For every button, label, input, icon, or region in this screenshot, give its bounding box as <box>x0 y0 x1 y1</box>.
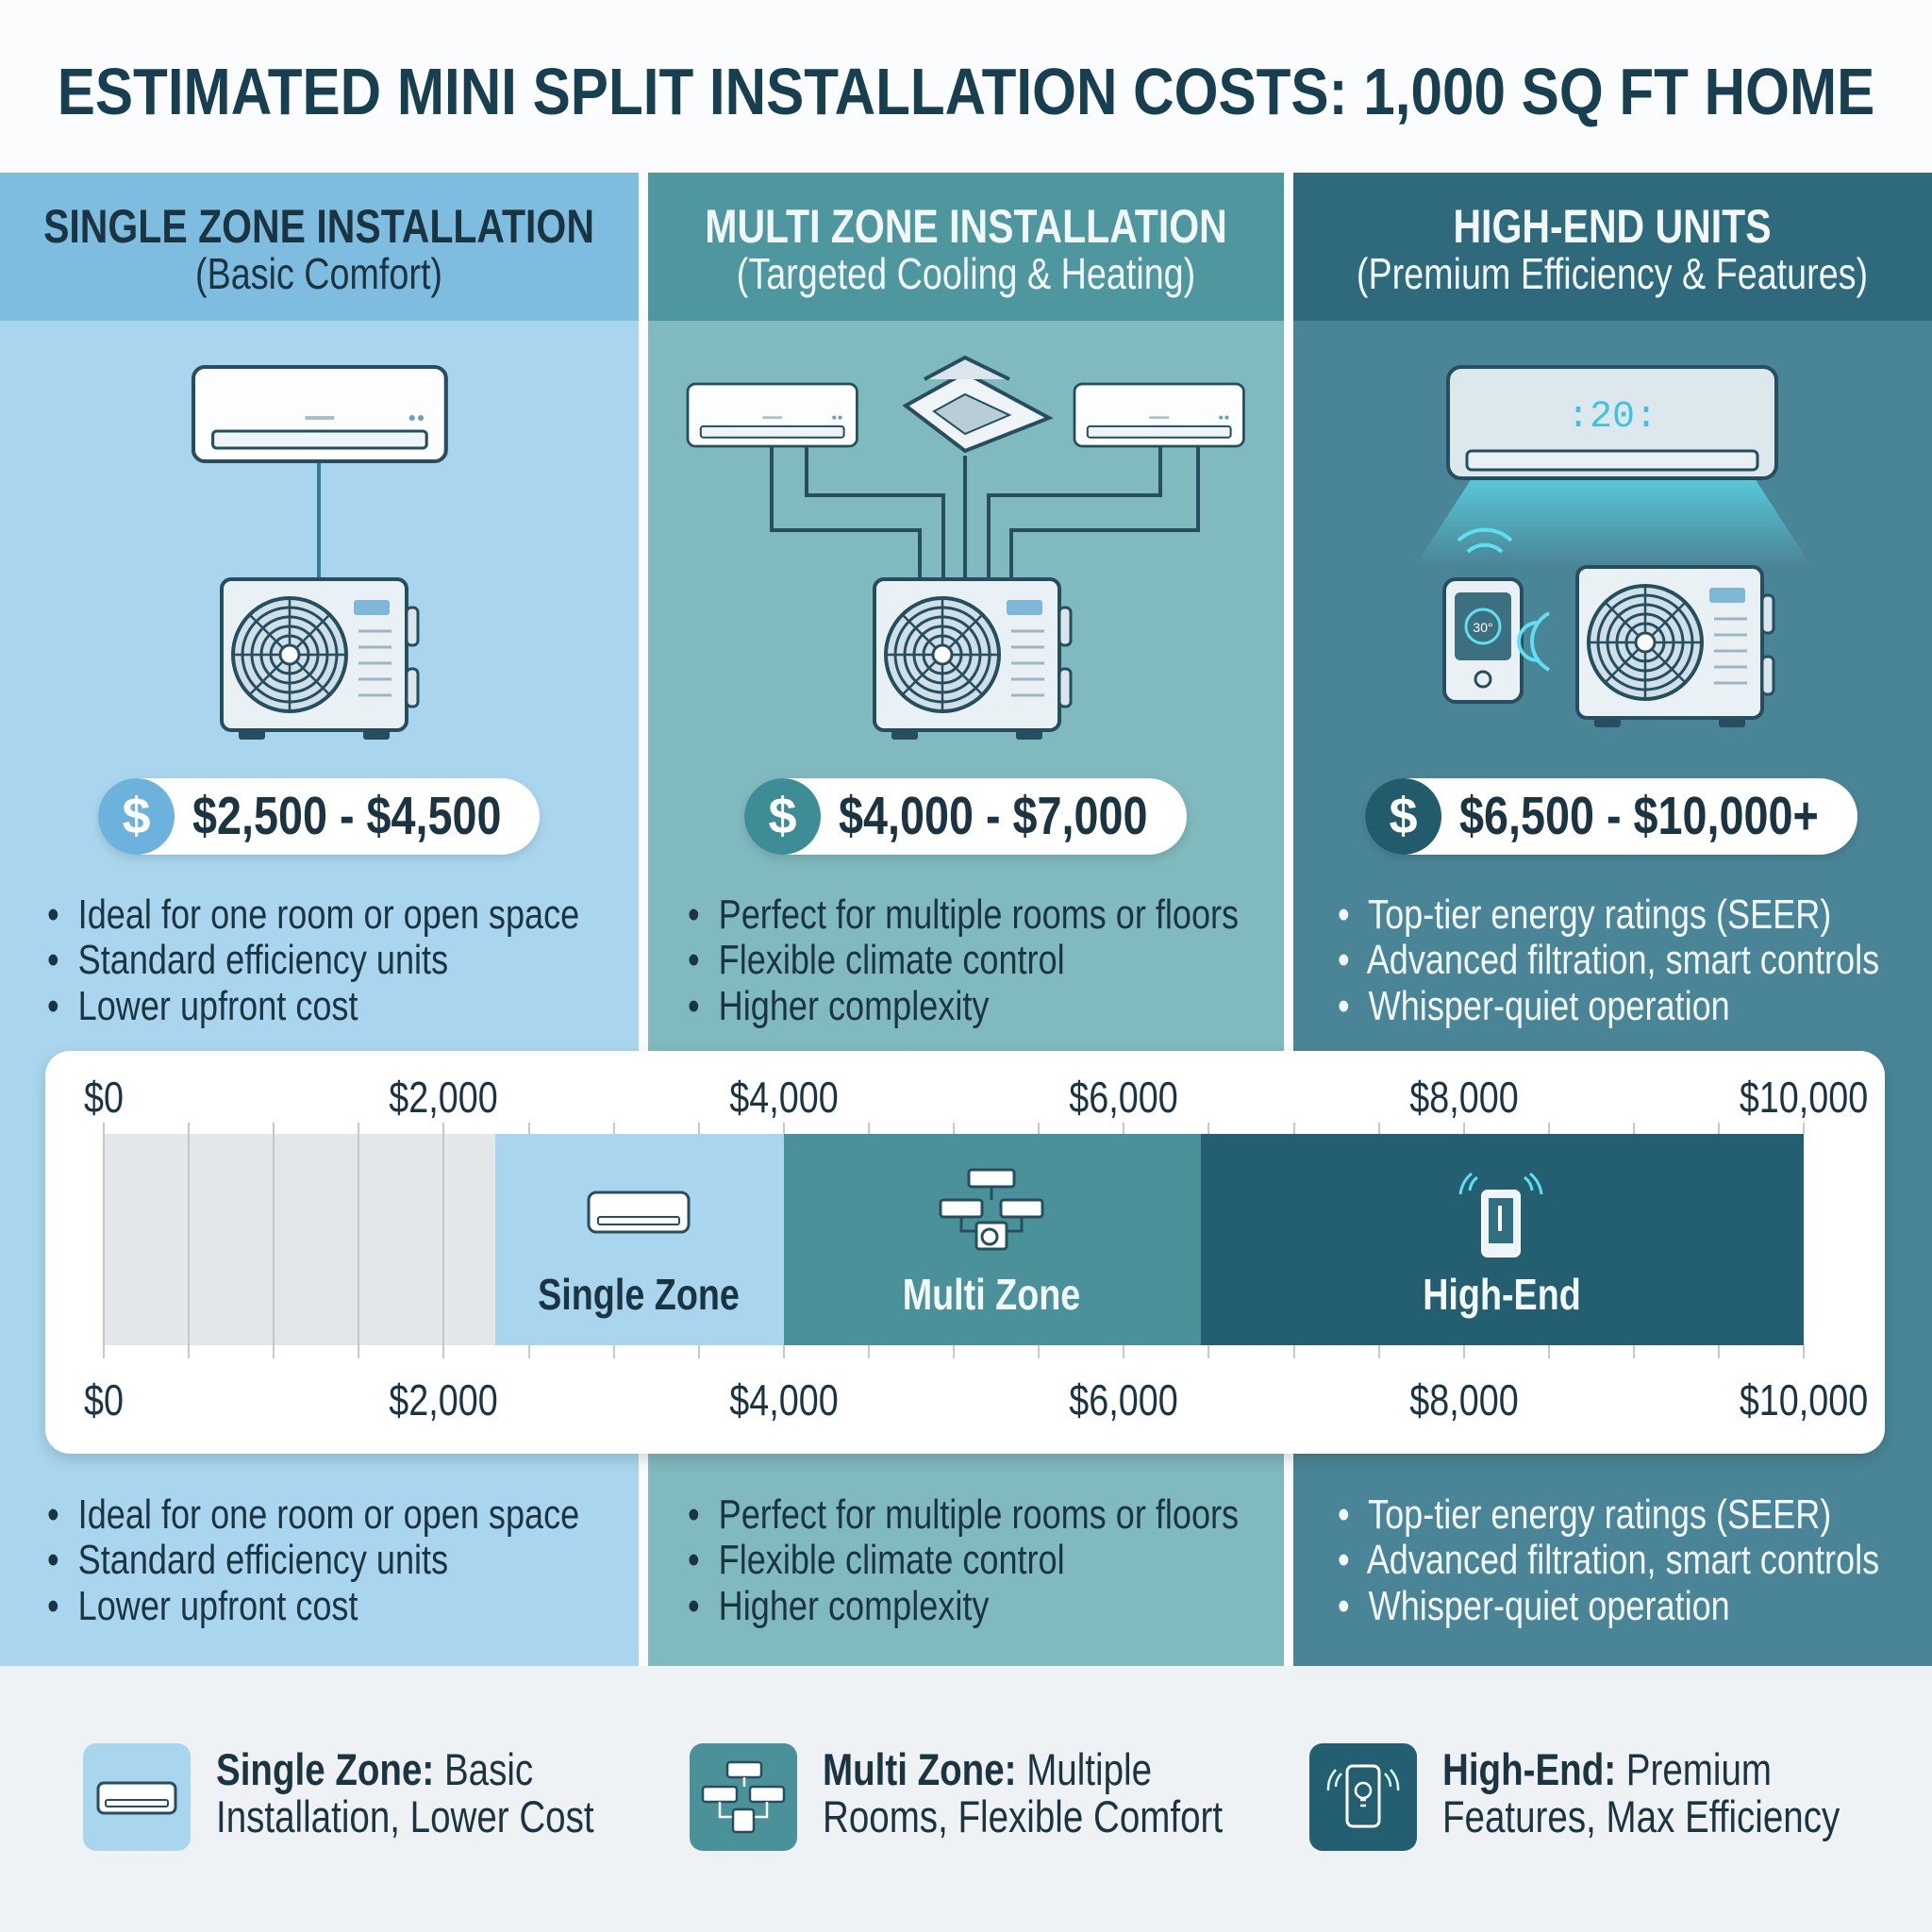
bar: high-end <box>1201 1134 1804 1345</box>
legend text: multi zone: Rooms, Flexible Comfort <box>823 1791 1223 1841</box>
axis labels: bottom: $8,000 <box>1409 1375 1519 1424</box>
panel: single zone <box>0 173 639 1666</box>
bullets repeat: multi zone: • Flexible climate control <box>688 1537 1065 1583</box>
bullets repeat: single zone: • Standard efficiency units <box>47 1537 448 1583</box>
price pill: multi zone <box>744 778 1187 855</box>
axis labels: top: $0 <box>84 1073 124 1122</box>
header: multi zone <box>648 173 1284 321</box>
axis labels: bottom: $4,000 <box>729 1375 839 1424</box>
axis labels: bottom: $10,000 <box>1740 1375 1868 1424</box>
panel: high-end <box>1293 173 1932 1666</box>
legend text: single zone: Installation, Lower Cost <box>216 1791 594 1841</box>
price text: $6,500 - $10,000+ <box>1459 786 1819 846</box>
axis labels: bottom: $6,000 <box>1069 1375 1178 1424</box>
bullets: multi zone: • Perfect for multiple rooms or floors <box>688 891 1239 938</box>
icons: equipment illustrations <box>191 355 1804 740</box>
bullets: multi zone: • Flexible climate control <box>688 937 1065 983</box>
subheading: high-end: (Premium Efficiency & Features) <box>1357 249 1868 298</box>
price text: $2,500 - $4,500 <box>192 786 501 846</box>
axis labels: top: $6,000 <box>1069 1073 1178 1122</box>
price pill: single zone <box>98 778 540 855</box>
icon: high-end system: :20: <box>1567 396 1657 439</box>
bullets: single zone: • Lower upfront cost <box>47 983 358 1029</box>
icon: dollar circle <box>98 778 175 855</box>
axis labels: bottom: $2,000 <box>389 1375 498 1424</box>
bar label: high-end: High-End <box>1423 1270 1581 1319</box>
icon: single zone bar <box>589 1192 689 1232</box>
panel: multi zone <box>648 173 1284 1666</box>
legend text: multi zone <box>823 1744 1223 1841</box>
axis labels: top: $10,000 <box>1740 1073 1868 1122</box>
bullets: single zone: • Standard efficiency units <box>47 937 448 983</box>
bullets: high-end: • Advanced filtration, smart controls <box>1338 937 1879 983</box>
icon: dollar circle <box>744 778 821 855</box>
bullets: single zone <box>47 891 579 1029</box>
bullets repeat: high-end <box>1338 1491 1879 1629</box>
bullets: single zone: • Ideal for one room or open space <box>47 891 579 938</box>
bullets repeat: multi zone <box>688 1491 1239 1629</box>
icon: high-end system <box>1415 367 1811 727</box>
bullets repeat: multi zone: • Perfect for multiple rooms or floors <box>688 1491 1239 1538</box>
footer legend <box>0 1666 1932 1932</box>
bullets: high-end: • Top-tier energy ratings (SEER) <box>1338 891 1831 938</box>
axis labels: top: $2,000 <box>389 1073 498 1122</box>
legend icon: multi zone <box>690 1743 797 1851</box>
heading: high-end: HIGH-END UNITS <box>1453 200 1772 253</box>
icon: dollar circle <box>1365 778 1441 855</box>
axis labels: bottom: $0 <box>84 1375 124 1424</box>
header: single zone <box>0 173 639 321</box>
icon: high-end bar <box>1460 1174 1541 1257</box>
bullets: multi zone <box>688 891 1239 1029</box>
legend text: high-end: High-End: Premium <box>1442 1744 1772 1794</box>
legend text: multi zone: Multi Zone: Multiple <box>823 1744 1152 1794</box>
bar label: multi zone: Multi Zone <box>903 1270 1080 1319</box>
bullets repeat: single zone: • Ideal for one room or open space <box>47 1491 579 1538</box>
subheading: multi zone: (Targeted Cooling & Heating) <box>737 249 1195 298</box>
icon: dollar circle: $ <box>768 788 797 844</box>
bullets repeat: high-end: • Advanced filtration, smart controls <box>1338 1537 1879 1583</box>
icon: dollar circle: $ <box>1389 788 1418 844</box>
bar: single zone <box>495 1134 784 1345</box>
bullets repeat: multi zone: • Higher complexity <box>688 1583 989 1629</box>
legend text: high-end <box>1442 1744 1840 1841</box>
heading: single zone: SINGLE ZONE INSTALLATION <box>43 200 594 253</box>
icon: multi zone system <box>688 358 1243 740</box>
axis labels: top: $4,000 <box>729 1073 839 1122</box>
header: high-end <box>1293 173 1932 321</box>
bullets repeat: single zone <box>47 1491 579 1629</box>
bullets: high-end <box>1338 891 1879 1029</box>
legend icon: single zone <box>83 1743 191 1851</box>
bullets repeat: single zone: • Lower upfront cost <box>47 1583 358 1629</box>
chart: cost range bar <box>45 1051 1885 1454</box>
icon: high-end system: 30° <box>1473 620 1493 635</box>
axis labels: top: $8,000 <box>1409 1073 1519 1122</box>
title: ESTIMATED MINI SPLIT INSTALLATION COSTS: 1,000 SQ FT HOME <box>58 55 1874 128</box>
legend text: high-end: Features, Max Efficiency <box>1442 1791 1840 1841</box>
bar: multi zone <box>784 1134 1201 1345</box>
bar label: single zone: Single Zone <box>538 1270 740 1319</box>
axis labels: top <box>84 1073 1868 1122</box>
heading: multi zone: MULTI ZONE INSTALLATION <box>705 200 1227 253</box>
legend text: single zone <box>216 1744 594 1841</box>
legend text: single zone: Single Zone: Basic <box>216 1744 533 1794</box>
icon: dollar circle: $ <box>122 788 151 844</box>
axis labels: bottom <box>84 1375 1868 1424</box>
bullets repeat: high-end: • Top-tier energy ratings (SEER) <box>1338 1491 1831 1538</box>
subheading: single zone: (Basic Comfort) <box>195 249 442 298</box>
icon: single zone system <box>193 367 446 740</box>
bullets repeat: high-end: • Whisper-quiet operation <box>1338 1583 1730 1629</box>
price text: $4,000 - $7,000 <box>839 786 1147 846</box>
bullets: high-end: • Whisper-quiet operation <box>1338 983 1730 1029</box>
icon: multi zone bar <box>941 1170 1042 1249</box>
price pill: high-end <box>1365 778 1857 855</box>
bullets: multi zone: • Higher complexity <box>688 983 989 1029</box>
legend icon: high-end <box>1309 1743 1417 1851</box>
